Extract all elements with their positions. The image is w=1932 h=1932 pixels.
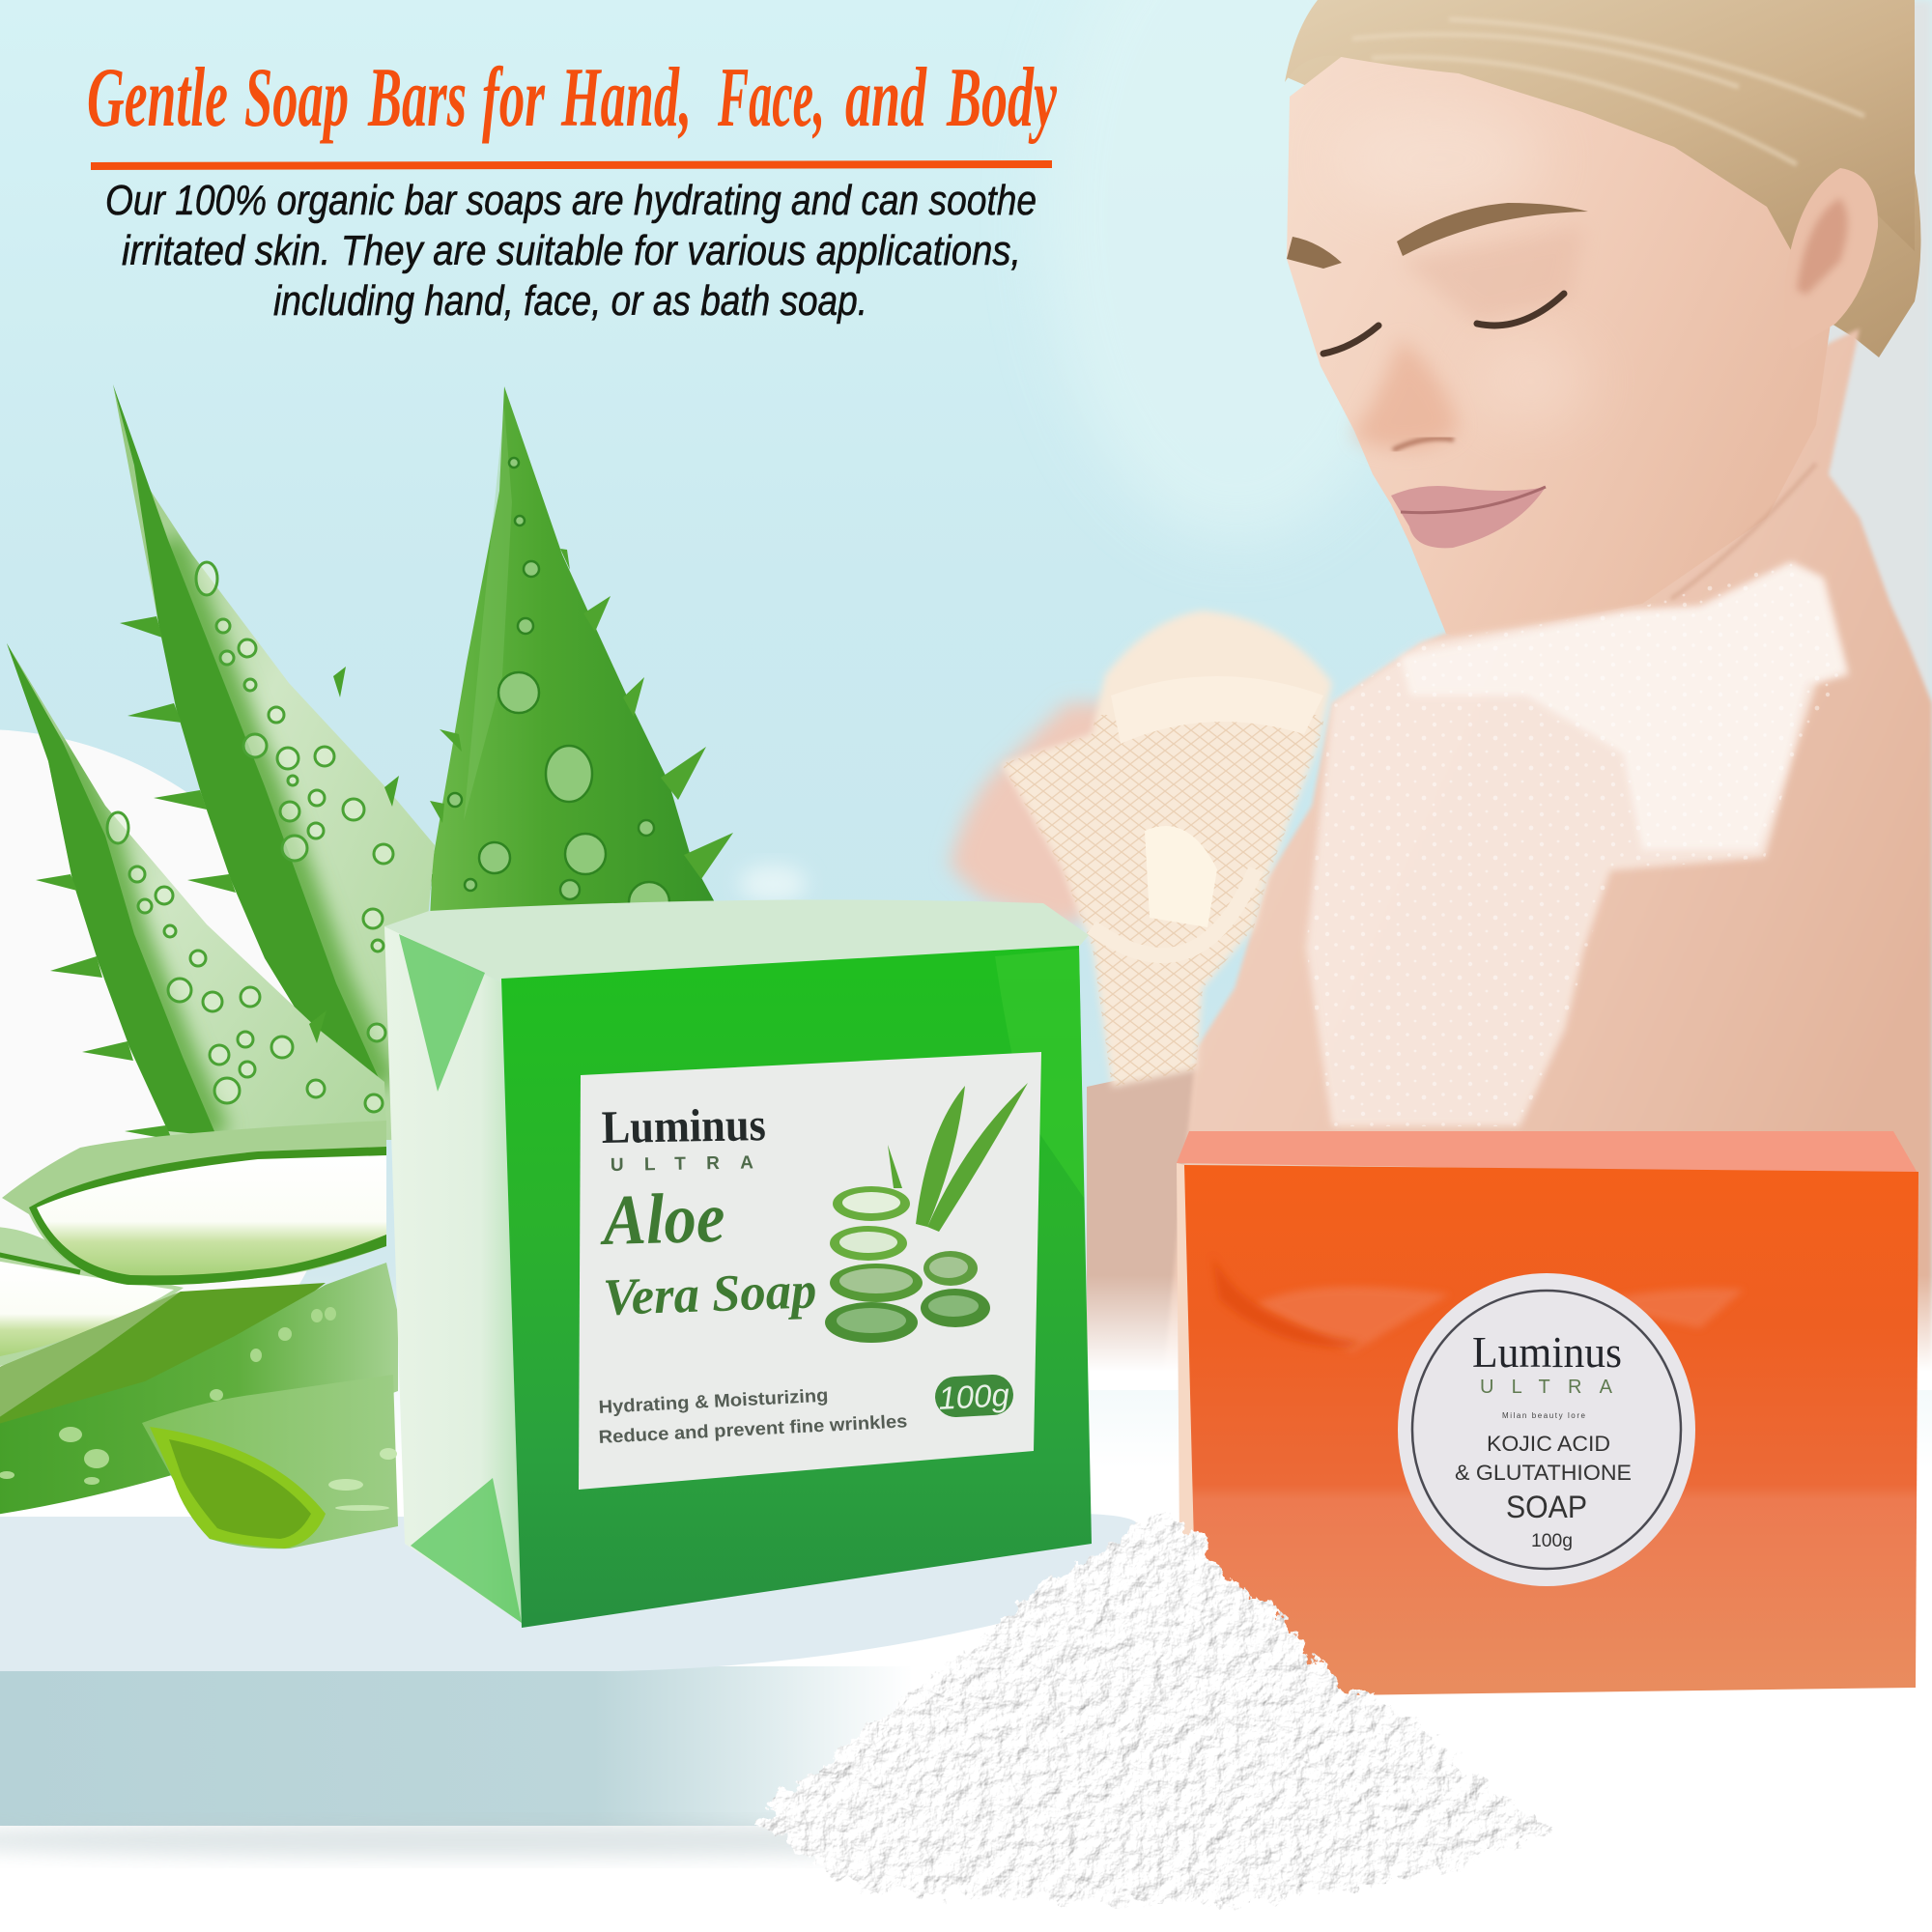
foam [1306, 561, 1849, 1126]
face [1287, 48, 1835, 638]
sticker kojic acid: KOJIC ACID [1487, 1432, 1610, 1456]
sticker weight: 100g [1531, 1531, 1573, 1551]
title: Bars [367, 51, 467, 145]
label weight pill: 100g [937, 1377, 1010, 1416]
green aloe vera soap [384, 899, 1092, 1628]
arm behind bar [1087, 1063, 1198, 1381]
hair front [1285, 0, 1915, 261]
neck crease [1671, 464, 1816, 599]
lip line [1401, 487, 1546, 513]
woman in shower [950, 0, 1932, 1390]
eyes [1323, 294, 1564, 354]
soap left edge [1177, 1163, 1198, 1697]
label aloe: Aloe [599, 1179, 725, 1261]
ear [1784, 168, 1878, 350]
soap front face [1184, 1165, 1918, 1697]
label claim one: Hydrating & Moisturizing [598, 1386, 829, 1418]
aloe vera leaves and slices [0, 384, 733, 1548]
leaf: centre [113, 384, 435, 1140]
white sphere [0, 729, 350, 1467]
description line three: including hand, face, or as bath soap. [273, 277, 867, 325]
description line two: irritated skin. They are suitable for various applications, [122, 227, 1021, 274]
description text [105, 177, 1037, 325]
label ultra: ULTRA [611, 1152, 753, 1176]
slice: front [142, 1375, 398, 1548]
cheek highlight [1473, 338, 1589, 425]
title [87, 51, 1058, 145]
label vera soap: Vera Soap [602, 1261, 817, 1326]
description line one: Our 100% organic bar soaps are hydrating and can soothe [105, 177, 1037, 224]
slice: large gel and skin [0, 1263, 398, 1515]
eye socket shade [1401, 227, 1584, 324]
title: Gentle [87, 51, 228, 145]
grey backdrop behind neck [1816, 0, 1932, 734]
nose shading [1354, 338, 1459, 449]
slice: top [2, 1121, 386, 1285]
round sticker [1398, 1273, 1695, 1586]
sticker soap: SOAP [1506, 1490, 1587, 1524]
eyebrows [1287, 203, 1588, 269]
title: Face, [717, 51, 825, 145]
sticker brand: Luminus [1472, 1327, 1622, 1377]
powder pile [755, 1514, 1556, 1906]
forehead highlight [1333, 106, 1546, 213]
water droplets on dark leaf [448, 458, 669, 923]
title: Hand, [560, 51, 692, 145]
title: Soap [244, 51, 349, 145]
small white blob behind leaf [739, 865, 807, 903]
title: Body [946, 51, 1058, 145]
lips [1391, 486, 1546, 548]
background glow behind head [1043, 0, 1430, 541]
title underline [91, 160, 1052, 170]
nostril [1393, 439, 1454, 450]
slice: back left [0, 1227, 184, 1367]
orange kojic acid soap [1177, 1131, 1918, 1697]
label brand: Luminus [601, 1099, 766, 1153]
leaf: left [7, 643, 386, 1145]
soap front face [501, 946, 1092, 1628]
loofah [995, 611, 1343, 1101]
hair strands [1352, 19, 1864, 164]
label claim two: Reduce and prevent fine wrinkles [598, 1411, 908, 1448]
label aloe illustration [825, 1083, 1028, 1343]
inner ear [1797, 198, 1847, 295]
title: and [845, 51, 927, 145]
soap highlights [1256, 1287, 1744, 1352]
soap wrapped side [384, 926, 522, 1623]
soap top face [1177, 1131, 1918, 1175]
title: for [482, 51, 545, 145]
water droplets on pale leaves [107, 562, 393, 1112]
fade to white [1063, 1275, 1932, 1372]
sticker glutathione: & GLUTATHIONE [1455, 1461, 1632, 1485]
hand [950, 703, 1188, 927]
sticker ultra: ULTRA [1480, 1377, 1613, 1398]
aloe label [579, 1052, 1041, 1490]
body [1163, 328, 1932, 1381]
leaf: right [411, 386, 733, 927]
soap dark swirl [1212, 1256, 1362, 1348]
soap highlight [995, 949, 1084, 1198]
sticker tagline: Milan beauty lore [1502, 1411, 1586, 1420]
soap top face [384, 899, 1089, 982]
hair back [1287, 0, 1920, 357]
platform [0, 1514, 1138, 1858]
wrap folds [399, 934, 522, 1623]
